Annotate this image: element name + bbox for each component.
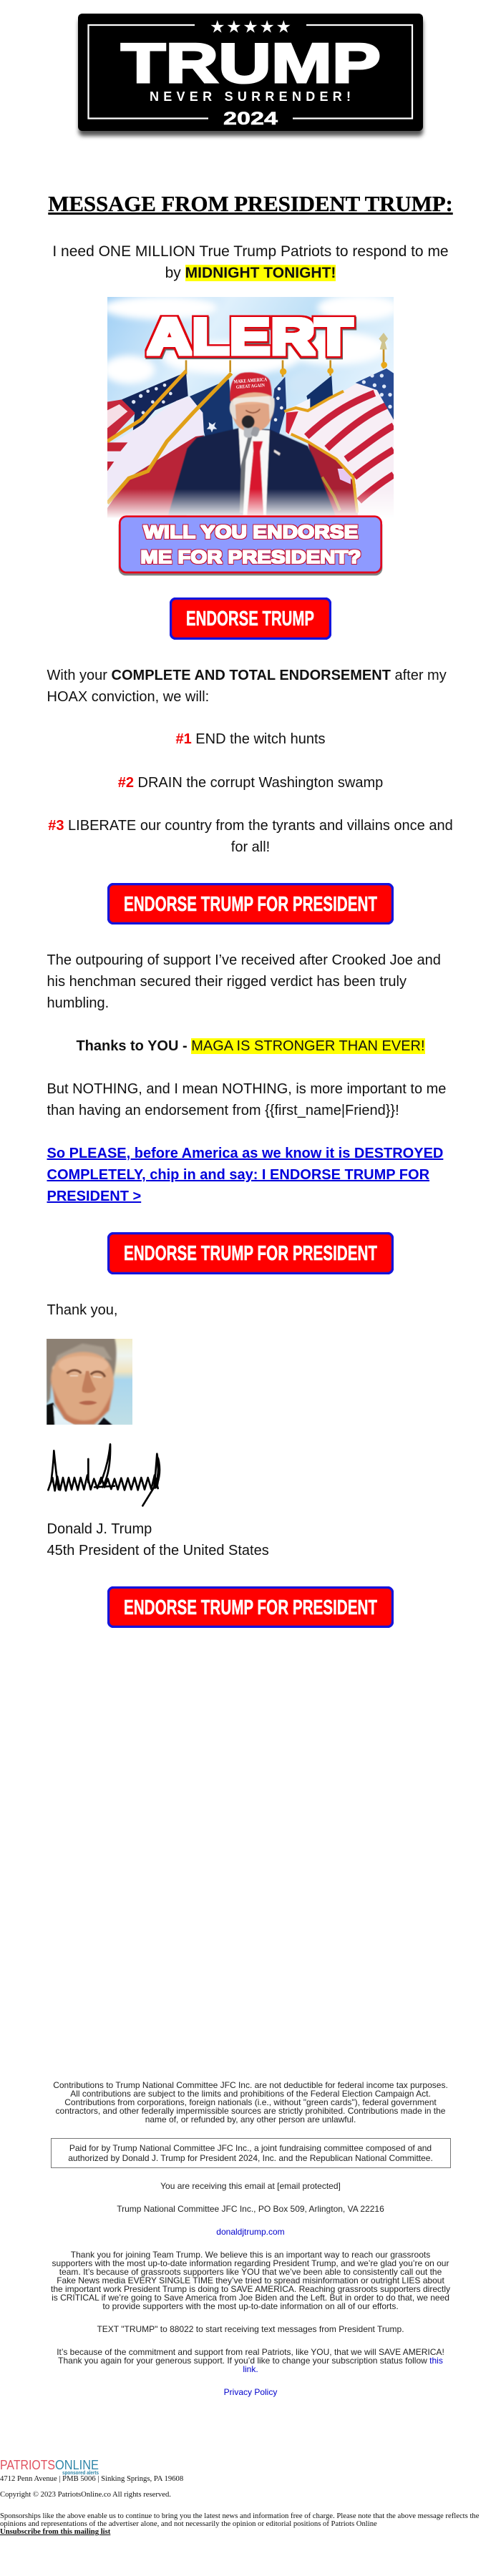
heading: message from President Trump: MESSAGE FROM PRESIDENT TRUMP:: [48, 191, 453, 216]
right US flag: [286, 369, 394, 515]
paid for by box: Paid for by Trump National Committee JFC Inc., a joint fundraising committee composed of and: [69, 2143, 432, 2153]
mailing address: Trump National Committee JFC Inc., PO Box 509, Arlington, VA 22216: [117, 2204, 384, 2214]
closing legal text: [57, 2347, 444, 2374]
paragraph: nothing more important: But NOTHING, and I mean NOTHING, is more important to me: [47, 1081, 446, 1097]
intro text: I need ONE MILLION True Trump Patriots to respond to me: [52, 243, 449, 260]
copyright: Copyright © 2023 PatriotsOnline.co All rights reserved.: [0, 2491, 171, 2499]
paid for by box: authorized by Donald J. Trump for President 2024, Inc. and the Republican National Committee.: [68, 2153, 433, 2163]
legal: thank you for joining: Thank you for joining Team Trump. We believe this is an important way to reach our grassroots: [71, 2250, 430, 2260]
callout: MAGA is stronger than ever: Thanks to YOU - MAGA IS STRONGER THAN EVER!: [76, 1038, 425, 1054]
paragraph: outpouring of support: his henchman secured their rigged verdict has been truly: [47, 974, 407, 990]
legal: thank you for joining: supporters with the most up-to-date information regarding President Trump, and we’re glad you’re on our: [52, 2258, 449, 2268]
signature: [47, 1443, 160, 1507]
website link: donaldjtrump.com: [216, 2227, 285, 2237]
photo: Trump portrait: [47, 1339, 132, 1425]
text message opt-in: TEXT "TRUMP" to 88022 to start receiving text messages from President Trump.: [97, 2324, 404, 2334]
privacy policy link: Privacy Policy: [224, 2387, 277, 2397]
link text: please chip in: [47, 1146, 444, 1204]
logo: Trump Never Surrender 2024: 2024: [223, 109, 278, 129]
sponsor address: 4712 Penn Avenue | PMB 5006 | Sinking Springs, PA 19608: [0, 2475, 183, 2483]
closing legal text: link.: [243, 2364, 258, 2374]
intro text: [52, 243, 449, 281]
legal: thank you for joining: to provide supporters with the most up-to-date information on all of our efforts.: [102, 2301, 399, 2311]
logo: Trump Never Surrender 2024: [76, 14, 427, 139]
logo: Trump Never Surrender 2024: NEVER SURRENDER!: [150, 89, 351, 104]
paid for by box: [50, 2138, 451, 2168]
sponsorship disclaimer and unsubscribe: opinions and representations of the advertiser alone, and not necessarily the opinion or editorial positions of Patriots Online: [0, 2520, 377, 2528]
sponsorship disclaimer and unsubscribe: Sponsorships like the above enable us to continue to bring you the latest news and information free of charge. Please note that the above message reflects the: [0, 2512, 479, 2520]
pledge 3: [48, 818, 453, 855]
Patriots Online logo: [0, 2458, 99, 2476]
closing legal text: It’s because of the commitment and support from real Patriots, like YOU, that we will SAVE AMERICA!: [57, 2347, 444, 2357]
button: endorse Trump for President 2: [107, 1232, 394, 1274]
legal: thank you for joining: the important work President Trump is doing to SAVE AMERICA. Reaching grassroots supporters directly: [51, 2284, 450, 2294]
alert image: Trump at rally with flags: ME FOR PRESIDENT?: [140, 547, 361, 567]
signature block text: 45th President of the United States: [47, 1543, 269, 1558]
legal: contributions disclaimer: Contributions from corporations, foreign nationals (i.e., without "green cards"), federal government: [64, 2097, 437, 2107]
logo: Trump Never Surrender 2024: ★★★★★: [210, 17, 291, 37]
left US flag: [107, 399, 136, 442]
sponsorship disclaimer and unsubscribe: [0, 2512, 480, 2536]
paragraph: outpouring of support: [47, 952, 441, 1011]
alert image: Trump at rally with flags: [107, 297, 394, 575]
paragraph: nothing more important: than having an endorsement from {{first_name|Friend}}!: [47, 1103, 399, 1118]
legal: contributions disclaimer: name of, or refunded by, any other person are unlawful.: [145, 2114, 356, 2124]
Texas flag: [190, 379, 233, 436]
paragraph: outpouring of support: The outpouring of support I’ve received after Crooked Joe and: [47, 952, 441, 968]
receiving email notice: You are receiving this email at [email protected]: [160, 2181, 341, 2191]
intro text: by MIDNIGHT TONIGHT!: [165, 265, 336, 281]
button: endorse Trump for President: [107, 883, 394, 924]
paragraph: complete and total endorsement: With your COMPLETE AND TOTAL ENDORSEMENT after my: [47, 668, 447, 683]
alert image: Trump at rally with flags: GREAT AGAIN: [236, 383, 265, 390]
sponsorship disclaimer and unsubscribe: Unsubscribe from this mailing list: [0, 2528, 110, 2536]
signature block text: [47, 1521, 269, 1558]
pledge 3: #3 LIBERATE our country from the tyrants and villains once and: [48, 818, 453, 834]
pledge 1: #1 END the witch hunts: [176, 731, 325, 747]
paragraph: outpouring of support: humbling.: [47, 995, 109, 1011]
link text: please chip in: So PLEASE, before America as we know it is DESTROYED: [47, 1146, 443, 1161]
legal: thank you for joining: is CRITICAL if we’re going to Save America from Joe Biden and the Left. But in order to do that, we need: [52, 2293, 449, 2303]
legal: contributions disclaimer: All contributions are subject to the limits and prohibitions of the Federal Election Campaign Act.: [70, 2089, 431, 2099]
paragraph: complete and total endorsement: HOAX conviction, we will:: [47, 689, 209, 705]
legal: contributions disclaimer: contractors, and other federally impermissible sources are strictly prohibited. Contributions made in the: [56, 2106, 445, 2116]
Patriots Online logo: PATRIOTS: [0, 2458, 55, 2472]
person: [168, 372, 335, 515]
logo: Trump Never Surrender 2024: TRUMP: [121, 31, 381, 94]
alert image: Trump at rally with flags: ALERT: [147, 308, 353, 364]
thank you: Thank you,: [47, 1302, 117, 1318]
middle flags: [270, 377, 286, 434]
legal: thank you for joining: team. It’s because of grassroots supporters like YOU that we’ve been able to consistently call out the: [59, 2267, 442, 2277]
link text: please chip in: PRESIDENT >: [47, 1189, 141, 1204]
paragraph: complete and total endorsement: [47, 668, 447, 705]
link text: please chip in: COMPLETELY, chip in and say: I ENDORSE TRUMP FOR: [47, 1167, 429, 1183]
legal: contributions disclaimer: [53, 2080, 448, 2124]
button: endorse Trump for President 3: [107, 1586, 394, 1628]
legal: thank you for joining: Fake News media EVERY SINGLE TIME they’ve tried to spread misinformation or outright LIES about: [57, 2275, 444, 2285]
button: endorse Trump: [170, 597, 331, 640]
pledge 2: #2 DRAIN the corrupt Washington swamp: [118, 775, 383, 791]
signature block text: Donald J. Trump: [47, 1521, 152, 1537]
Patriots Online logo: sponsored alerts: [62, 2471, 99, 2476]
pledge 3: for all!: [231, 839, 270, 855]
Patriots Online logo: ONLINE: [55, 2458, 99, 2472]
alert image: Trump at rally with flags: WILL YOU ENDORSE: [144, 522, 358, 542]
legal: contributions disclaimer: Contributions to Trump National Committee JFC Inc. are not deductible for federal income tax purposes.: [53, 2080, 448, 2090]
paragraph: nothing more important: [47, 1081, 446, 1118]
closing legal text: Thank you again for your generous support. If you’d like to change your subscription status follow this: [58, 2356, 443, 2366]
alert image: Trump at rally with flags: MAKE AMERICA: [233, 376, 267, 385]
legal: thank you for joining: [51, 2250, 450, 2311]
